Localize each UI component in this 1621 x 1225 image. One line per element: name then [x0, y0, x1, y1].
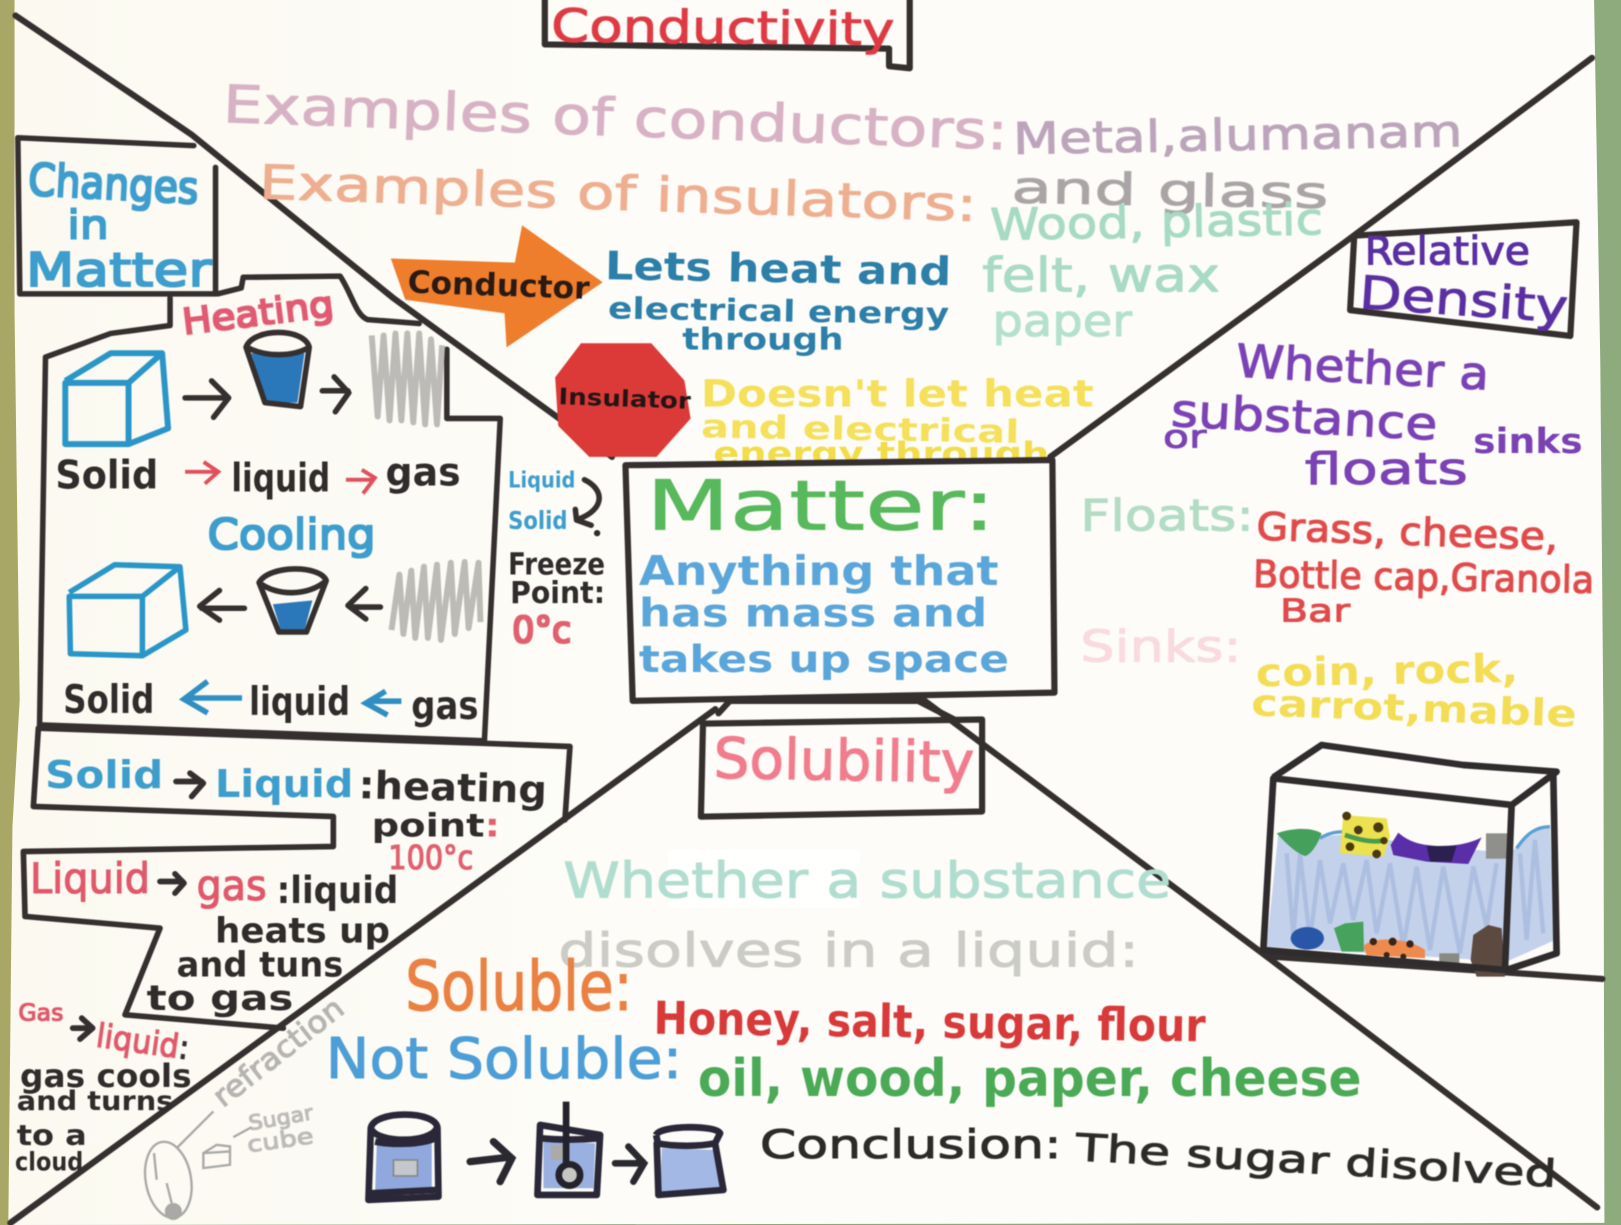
gas to liquid note: and turns: [17, 1086, 173, 1117]
heading: changes in matter: [26, 155, 213, 298]
definition: density: or: [1163, 420, 1207, 456]
arrow: [200, 590, 244, 620]
definition: insulator: Doesn't let heat: [701, 371, 1094, 415]
icon: small sketches: [139, 1111, 252, 1221]
gas to liquid note: liquid:: [94, 1016, 192, 1067]
definition: insulator: energy through: [713, 436, 1049, 472]
label row: gas liquid solid: Solid: [63, 677, 154, 723]
not soluble list: oil, wood, paper, cheese: [698, 1049, 1361, 1109]
freeze point note: Freeze: [508, 548, 605, 583]
arrow: [185, 381, 229, 417]
insulator list: paper: [992, 297, 1132, 347]
liquid to gas note: gas: [197, 861, 267, 910]
definition: conductor: electrical energy: [608, 291, 949, 332]
conductor list: [1011, 107, 1463, 219]
heading box: solubility: [701, 701, 982, 817]
solid to liquid note: 100°c: [388, 838, 473, 877]
sinks list: coin, rock,: [1255, 647, 1519, 696]
heading: cooling: Cooling: [208, 510, 376, 559]
icon: sugar dissolving sequence: [368, 1102, 723, 1200]
panel: matter: [625, 460, 1054, 701]
floats label: Floats:: [1080, 491, 1254, 541]
octagon: insulator: [555, 343, 692, 457]
definition: conductor: [605, 244, 952, 357]
freeze point note: Point:: [510, 576, 605, 611]
freeze point note: Liquid: [508, 468, 575, 494]
heading: changes in matter: Changes: [27, 155, 200, 215]
label row: solid liquid gas: Solid: [55, 452, 158, 498]
examples of insulators: Examples of insulators:: [258, 156, 978, 233]
definition: conductor: through: [682, 322, 844, 357]
heading box: relative density: [1350, 222, 1577, 336]
panel: changes in matter, lower: [15, 728, 570, 1177]
solid to liquid note: Solid: [45, 753, 163, 798]
heading: heating: Heating: [180, 284, 336, 343]
gray science sketch: refraction and sugar cube: [139, 990, 350, 1221]
sinks list: carrot,mable: [1251, 680, 1578, 736]
definition: density: Whether a: [1235, 334, 1490, 401]
definition: matter: takes up space: [639, 637, 1009, 681]
gas scribble: [391, 562, 480, 640]
definition: solubility: disolves in a liquid:: [558, 924, 1139, 978]
definition: density: floats: [1305, 445, 1468, 495]
panel: changes in matter, upper: [18, 138, 605, 741]
heading: relative density: Density: [1358, 266, 1570, 334]
label row: gas liquid solid: liquid: [249, 679, 350, 725]
label: sugar cube: Sugar: [247, 1100, 315, 1135]
heading box: conductivity: [545, 0, 910, 68]
label row: gas liquid solid: gas: [411, 683, 478, 729]
icon: melting cube: [65, 353, 168, 444]
definition: matter: Anything that: [639, 547, 999, 595]
insulator list: felt, wax: [982, 249, 1220, 304]
arrow: [348, 588, 380, 619]
icon: freezing cube: [69, 565, 186, 656]
label: sugar cube: [246, 1100, 315, 1158]
floats list: Bar: [1280, 593, 1350, 629]
gas to liquid note: to a: [17, 1119, 87, 1152]
definition: density: substance: [1170, 384, 1439, 451]
conclusion: [760, 1123, 1558, 1196]
liquid to gas note: heats up: [215, 911, 390, 951]
definition: conductor: Lets heat and: [605, 244, 952, 295]
arrow: conductor: Conductor: [407, 265, 591, 307]
heading: changes in matter: in: [67, 203, 109, 249]
heading: conductivity: Conductivity: [551, 0, 895, 56]
examples of conductors: Examples of conductors:: [222, 75, 1009, 162]
arrow: [322, 377, 349, 412]
freeze point note: Solid: [508, 506, 567, 535]
heading: matter: Matter:: [646, 467, 996, 546]
heading: solubility: Solubility: [713, 726, 975, 796]
arrow: conductor: [391, 225, 603, 347]
liquid to gas note: to gas: [147, 979, 293, 1019]
definition: density: [1163, 334, 1583, 495]
solid to liquid note: Liquid: [215, 762, 353, 807]
conductor list: Metal,alumanam: [1012, 107, 1463, 165]
heading: changes in matter: Matter: [26, 244, 213, 298]
label row: solid liquid gas: [55, 450, 461, 502]
icon: beaker of liquid: [246, 332, 309, 407]
gas to liquid note: Gas: [18, 1000, 63, 1026]
sinks list: [1251, 647, 1578, 736]
insulator list: Wood, plastic: [990, 195, 1323, 251]
heading box: changes in matter: [18, 138, 216, 294]
floats list: Grass, cheese,: [1256, 506, 1559, 560]
sinks label: Sinks:: [1080, 623, 1242, 673]
icon: water tank with floating and sinking objects: [1263, 745, 1557, 977]
panel outline: [40, 276, 500, 741]
floats list: Bottle cap,Granola: [1253, 552, 1595, 602]
freeze point note: 0°c: [512, 609, 571, 652]
soluble list: Honey, salt, sugar, flour: [653, 992, 1206, 1052]
solid to liquid note: :heating: [358, 763, 547, 813]
panel: conductivity: [222, 0, 1463, 472]
heading: relative density: Relative: [1365, 230, 1530, 275]
not soluble label: Not Soluble:: [326, 1027, 682, 1092]
liquid to gas note: and tuns: [177, 945, 343, 985]
gas to liquid note: gas cools: [20, 1059, 192, 1095]
label: sugar cube: cube: [246, 1124, 315, 1158]
conclusion: Conclusion:: [760, 1123, 1062, 1168]
gas scribble: [372, 333, 442, 424]
definition: solubility: [558, 853, 1171, 978]
correction tape: [668, 850, 860, 908]
definition: insulator: and electrical: [701, 407, 1020, 451]
freeze point note: [508, 468, 605, 652]
definition: matter: has mass and: [639, 591, 987, 636]
floats list: [1253, 506, 1595, 629]
panel: relative density: [1080, 222, 1595, 977]
definition: insulator: [701, 371, 1094, 472]
icon: beaker cooling: [259, 569, 326, 632]
solid to liquid note: [45, 753, 547, 877]
label row: gas liquid solid: [63, 677, 478, 729]
boxes outline: [23, 728, 570, 1028]
liquid to gas note: Liquid: [30, 854, 150, 903]
insulator list: [982, 195, 1323, 347]
liquid to gas note: [30, 854, 398, 1019]
gas to liquid note: [15, 1000, 192, 1177]
label: refraction: refraction: [206, 990, 350, 1114]
heading: relative density: [1358, 230, 1570, 334]
definition: density: sinks: [1473, 421, 1583, 462]
label row: solid liquid gas: gas: [386, 450, 461, 496]
definition: matter: [639, 547, 1009, 681]
conductor list: and glass: [1011, 164, 1329, 219]
gas to liquid note: cloud: [15, 1147, 83, 1177]
conclusion: The sugar disolved: [1073, 1125, 1558, 1196]
octagon: insulator: Insulator: [558, 384, 692, 415]
matter box: [625, 460, 1054, 701]
liquid to gas note: :liquid: [277, 868, 398, 912]
soluble label: Soluble:: [405, 948, 633, 1027]
definition: solubility: Whether a substance: [563, 853, 1171, 909]
label row: solid liquid gas: liquid: [231, 456, 330, 502]
solid to liquid note: point:: [372, 806, 500, 844]
panel: solubility: [139, 701, 1558, 1221]
